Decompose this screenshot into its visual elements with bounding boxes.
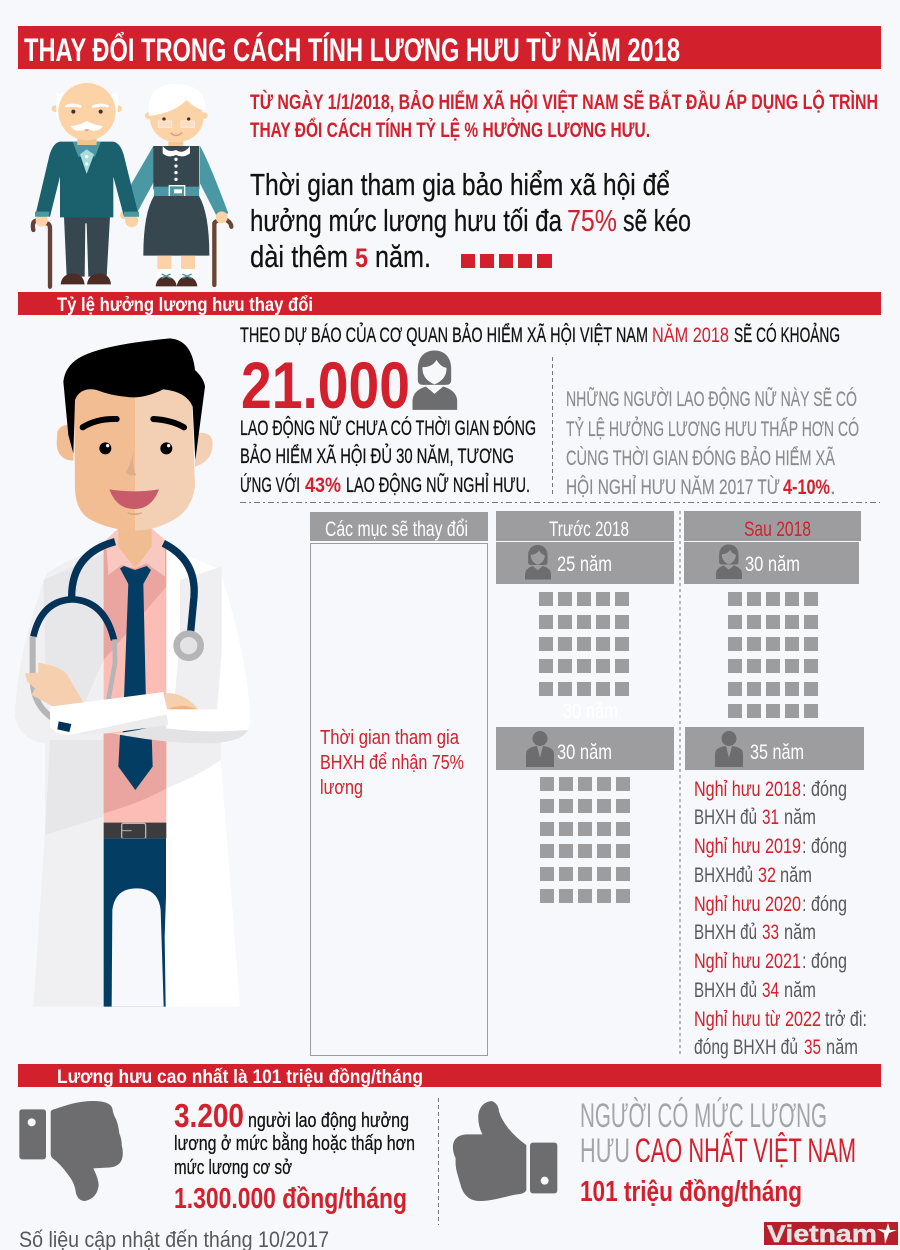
table column: items: lương (320, 777, 363, 799)
after 2018 schedule text: năm (784, 806, 816, 829)
table column: items: Thời gian tham gia (320, 727, 460, 749)
logo: Vietnam (767, 1221, 877, 1248)
low pension text: lương ở mức bằng hoặc thấp hơn (174, 1132, 415, 1155)
table header: before 2018 (496, 511, 674, 541)
after 2018 schedule text: Nghỉ hưu 2018 (694, 778, 801, 801)
female workers text: 43% (305, 474, 341, 497)
large statement text: 75% (567, 203, 617, 238)
female workers text: LAO ĐỘNG NỮ CHƯA CÓ THỜI GIAN ĐÓNG (240, 416, 536, 440)
table header: after 2018: Sau 2018 (744, 518, 811, 541)
after 2018 schedule text: năm (780, 864, 812, 887)
after 2018 schedule text: năm (784, 921, 816, 944)
intro red text: THAY ĐỔI CÁCH TÍNH TỶ LỆ % HƯỞNG LƯƠNG HƯU. (250, 118, 650, 142)
logo (764, 1221, 898, 1248)
icon: thumbs up (453, 1101, 557, 1201)
large statement text: Thời gian tham gia bảo hiểm xã hội để (250, 167, 670, 202)
after: men 35 years (685, 727, 864, 770)
after 2018 schedule text: : đóng (802, 778, 847, 801)
after 2018 schedule text: BHXH đủ (694, 921, 757, 944)
squares: women before 2018 (539, 592, 629, 696)
five red squares (461, 254, 552, 268)
after 2018 schedule text: Nghỉ hưu 2019 (694, 835, 801, 858)
ghost label: 30 năm (563, 700, 618, 723)
female workers text (240, 416, 536, 497)
big number 21.000: 21.000 (241, 348, 410, 422)
after 2018 schedule text: Nghỉ hưu 2020 (694, 893, 801, 916)
forecast lead line: THEO DỰ BÁO CỦA CƠ QUAN BẢO HIỂM XÃ HỘI VIỆT NAM (240, 323, 648, 347)
low pension text: 1.300.000 đồng/tháng (174, 1183, 407, 1215)
lower pension rate text: 4-10% (783, 476, 830, 499)
squares: men before 2018 (540, 777, 630, 903)
squares: women after 2018 (728, 592, 818, 718)
before: women 25 years (496, 542, 674, 584)
table header: after 2018 (684, 511, 861, 541)
after 2018 schedule text: : đóng (802, 835, 847, 858)
after 2018 schedule text: BHXH đủ (694, 806, 757, 829)
after 2018 schedule text: trở đi: (825, 1008, 867, 1031)
after 2018 schedule text: BHXH đủ (694, 979, 757, 1002)
after 2018 schedule text: 33 (762, 921, 779, 944)
after 2018 schedule text: năm (826, 1036, 858, 1059)
large statement text (250, 167, 691, 274)
low pension text: 3.200 (174, 1097, 244, 1134)
table column: items: BHXH để nhận 75% (320, 752, 464, 774)
large statement text: năm. (375, 239, 431, 274)
title banner: THAY ĐỔI TRONG CÁCH TÍNH LƯƠNG HƯU TỪ NĂM 2018 (24, 32, 680, 68)
table column: items (310, 512, 488, 1056)
highest pension text: HƯU (580, 1132, 630, 1170)
icon: thumbs down (19, 1101, 123, 1201)
large statement text: hưởng mức lương hưu tối đa (250, 203, 563, 238)
after 2018 schedule text: 32 (758, 864, 776, 887)
section bar: ty le: Tỷ lệ hưởng lương hưu thay đổi (57, 295, 313, 316)
illustration: elderly couple (33, 83, 231, 287)
forecast lead line: NĂM 2018 (652, 324, 729, 347)
highest pension text: 101 triệu đồng/tháng (580, 1176, 802, 1208)
lower pension rate text: . (830, 476, 836, 499)
intro red text (250, 90, 878, 142)
section bar: highest pension: Lương hưu cao nhất là 101 triệu đồng/tháng (57, 1067, 423, 1088)
illustration: doctor (15, 338, 251, 1007)
female workers text: ỨNG VỚI (240, 474, 300, 497)
before: women 25 years: 25 năm (557, 553, 612, 576)
after 2018 schedule text: 34 (762, 979, 779, 1002)
after 2018 schedule text: 31 (762, 806, 779, 829)
after 2018 schedule text: Nghỉ hưu từ 2022 (694, 1008, 821, 1031)
after 2018 schedule text: năm (784, 979, 816, 1002)
highest pension text (580, 1097, 856, 1208)
after: women 30 years: 30 năm (745, 553, 800, 576)
table header: before 2018: Trước 2018 (549, 518, 629, 541)
large statement text: 5 (355, 243, 368, 273)
before: men 30 years: 30 năm (557, 741, 612, 764)
female workers text: BẢO HIỂM XÃ HỘI ĐỦ 30 NĂM, TƯƠNG (240, 444, 514, 468)
low pension text: người lao động hưởng (248, 1110, 409, 1132)
female workers text: LAO ĐỘNG NỮ NGHỈ HƯU. (346, 473, 530, 497)
table column: items: Các mục sẽ thay đổi (325, 518, 468, 541)
lower pension rate text: HỘI NGHỈ HƯU NĂM 2017 TỪ (566, 476, 780, 499)
after: women 30 years (684, 542, 859, 584)
section bar: ty le (18, 292, 881, 316)
before: men 30 years (496, 727, 674, 770)
large statement text: sẽ kéo (623, 203, 691, 238)
icon: woman (412, 350, 457, 410)
forecast lead line: SẼ CÓ KHOẢNG (734, 323, 840, 347)
after 2018 schedule text: BHXHđủ (694, 864, 753, 887)
after 2018 schedule text: Nghỉ hưu 2021 (694, 950, 801, 973)
lower pension rate text (566, 387, 859, 499)
low pension text (174, 1097, 415, 1215)
after 2018 schedule text: : đóng (802, 893, 847, 916)
after 2018 schedule text: 35 (804, 1036, 821, 1059)
after 2018 schedule text: đóng BHXH đủ (694, 1036, 798, 1059)
after: men 35 years: 35 năm (750, 741, 804, 764)
after 2018 schedule text (694, 778, 867, 1059)
section bar: highest pension (18, 1064, 881, 1088)
low pension text: mức lương cơ sở (174, 1157, 292, 1179)
large statement text: dài thêm (250, 239, 348, 274)
after 2018 schedule text: : đóng (802, 950, 847, 973)
